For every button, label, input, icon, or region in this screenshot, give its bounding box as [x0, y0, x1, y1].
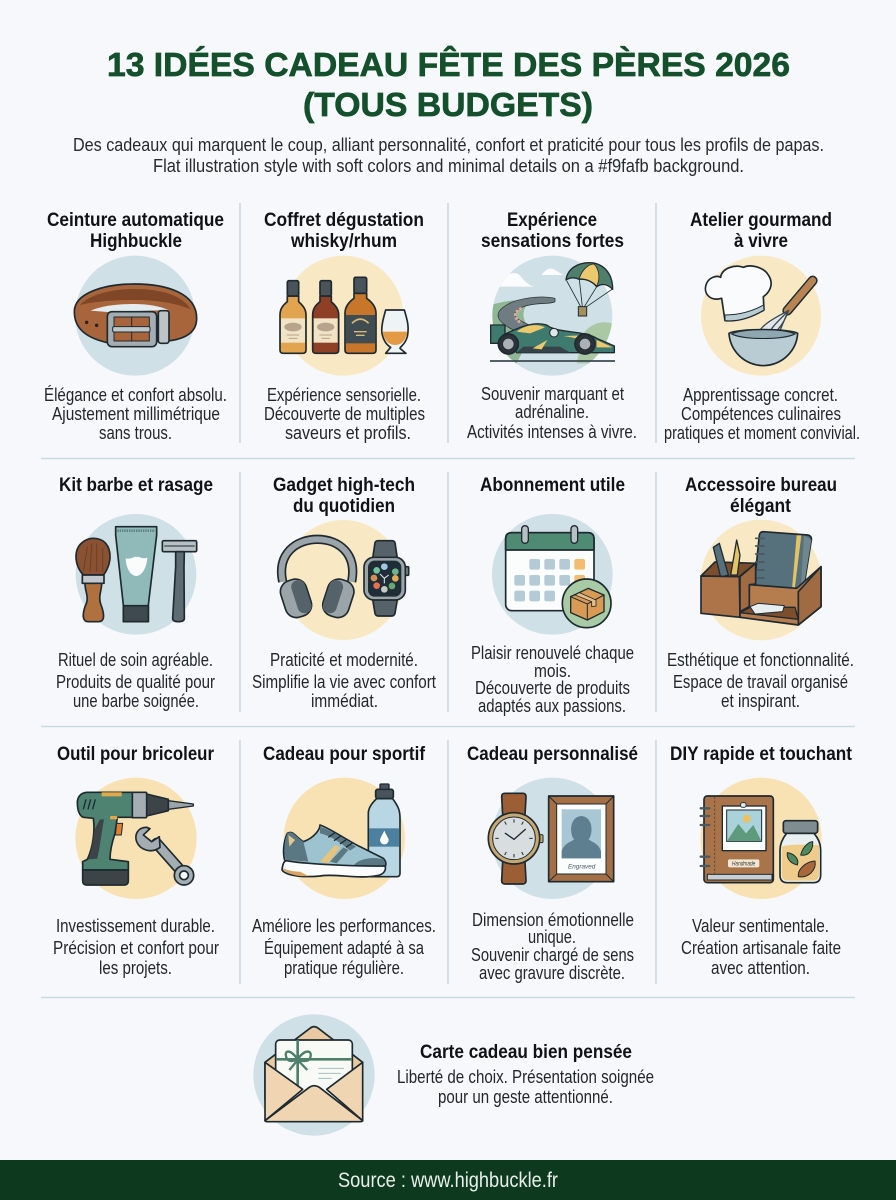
- heading: sportif: Cadeau pour sportif: [263, 744, 426, 765]
- description: DIY: Création artisanale faite: [681, 938, 841, 958]
- heading: atelier: [690, 210, 832, 252]
- panel: kit barbe: [56, 475, 215, 711]
- description: ceinture: sans trous.: [99, 423, 172, 443]
- icon: sneaker and bottle: [282, 778, 405, 899]
- description: sensations: Activités intenses à vivre.: [467, 422, 637, 442]
- icon: race car and parachute: [490, 256, 617, 376]
- description: coffret: saveurs et profils.: [285, 423, 411, 443]
- text: carte cadeau: Liberté de choix. Présentation soignée: [397, 1067, 654, 1087]
- text: carte cadeau: [397, 1042, 654, 1107]
- icon: calendar and box: [492, 514, 613, 635]
- icon: scrapbook and jar: [700, 778, 822, 899]
- icon: shaving kit: [76, 514, 197, 635]
- text: carte cadeau: pour un geste attentionné.: [438, 1087, 613, 1107]
- icon: desk organizer: [701, 520, 821, 640]
- heading: atelier: à vivre: [734, 231, 788, 252]
- heading: coffret: [264, 210, 424, 252]
- description: coffret: Découverte de multiples: [264, 404, 425, 424]
- description: sportif: pratique régulière.: [284, 958, 404, 978]
- text: carte cadeau: Carte cadeau bien pensée: [420, 1042, 632, 1063]
- description: gadget: Praticité et modernité.: [270, 650, 418, 670]
- description: accessoire: [667, 650, 854, 711]
- panel: abonnement: [471, 475, 634, 716]
- description: accessoire: et inspirant.: [721, 691, 800, 711]
- icon: chef hat, whisk and bowl: [701, 256, 821, 376]
- description: outil: les projets.: [99, 958, 172, 978]
- icon: headphones and watch: [277, 520, 409, 640]
- description: kit barbe: Rituel de soin agréable.: [58, 650, 213, 670]
- description: abonnement: Découverte de produits: [475, 678, 630, 698]
- title: [107, 46, 790, 123]
- heading: accessoire: Accessoire bureau: [685, 475, 837, 496]
- engraved caption: Engraved: [568, 864, 596, 871]
- description: DIY: Valeur sentimentale.: [692, 916, 829, 936]
- heading: sensations: [481, 210, 624, 252]
- heading: accessoire: élégant: [730, 496, 792, 517]
- panel: DIY: [670, 744, 853, 978]
- description: ceinture: [44, 385, 227, 443]
- description: gadget: immédiat.: [311, 691, 378, 711]
- description: coffret: [264, 385, 425, 443]
- panel: coffret whisky: [264, 210, 425, 443]
- panel: cadeau personnalisé: [467, 744, 638, 983]
- description: personnalisé: avec gravure discrète.: [479, 963, 625, 983]
- icon: whisky bottles: [280, 256, 408, 376]
- description: gadget: [252, 650, 436, 711]
- heading: gadget: du quotidien: [293, 496, 395, 517]
- heading: ceinture: Ceinture automatique: [47, 210, 224, 231]
- description: abonnement: Plaisir renouvelé chaque: [471, 643, 634, 663]
- heading: personnalisé: Cadeau personnalisé: [467, 744, 638, 765]
- title: 13 IDÉES CADEAU FÊTE DES PÈRES 2026: [107, 46, 790, 83]
- panel: carte cadeau: [253, 1014, 654, 1136]
- heading: atelier: Atelier gourmand: [690, 210, 832, 231]
- panel: ceinture: [44, 210, 227, 443]
- description: DIY: avec attention.: [711, 958, 810, 978]
- heading: ceinture: Highbuckle: [90, 231, 182, 252]
- description: kit barbe: une barbe soignée.: [73, 691, 199, 711]
- description: abonnement: adaptés aux passions.: [478, 696, 626, 716]
- panel: outil bricoleur: [53, 744, 219, 978]
- description: accessoire: Espace de travail organisé: [673, 672, 848, 692]
- icon: watch and photo frame: [488, 778, 614, 899]
- heading: accessoire: [685, 475, 837, 517]
- panel: sensations fortes: [467, 210, 637, 442]
- heading: sensations: Expérience: [507, 210, 597, 231]
- description: outil: Investissement durable.: [56, 916, 215, 936]
- description: personnalisé: Dimension émotionnelle: [472, 910, 634, 930]
- heading: coffret: Coffret dégustation: [264, 210, 424, 231]
- description: sensations: adrénaline.: [515, 402, 589, 422]
- description: sportif: Équipement adapté à sa: [264, 938, 425, 958]
- description: ceinture: Ajustement millimétrique: [52, 404, 220, 424]
- description: abonnement: mois.: [534, 661, 571, 681]
- heading: gadget: [273, 475, 415, 517]
- panel: gadget high-tech: [252, 475, 436, 711]
- icon: belt: [74, 256, 197, 376]
- handmade label: Handmade: [732, 861, 756, 867]
- icon: gift card envelope: [253, 1014, 375, 1136]
- description: kit barbe: [56, 650, 215, 711]
- subtitle: [73, 135, 824, 176]
- description: personnalisé: unique.: [528, 927, 576, 947]
- subtitle: Flat illustration style with soft colors and minimal details on a #f9fafb background.: [153, 156, 744, 176]
- description: atelier: Apprentissage concret.: [683, 385, 838, 405]
- description: sensations: Souvenir marquant et: [481, 384, 624, 404]
- panel: cadeau sportif: [252, 744, 436, 978]
- heading: outil: Outil pour bricoleur: [57, 744, 215, 765]
- description: sportif: Améliore les performances.: [252, 916, 436, 936]
- description: accessoire: Esthétique et fonctionnalité.: [667, 650, 854, 670]
- description: sportif: [252, 916, 436, 978]
- icon: drill and wrench: [75, 778, 197, 899]
- description: personnalisé: Souvenir chargé de sens: [471, 945, 634, 965]
- description: sensations: [467, 384, 637, 442]
- description: outil: [53, 916, 219, 978]
- heading: kit barbe: Kit barbe et rasage: [59, 475, 213, 496]
- description: DIY: [681, 916, 841, 978]
- panel: accessoire bureau: [667, 475, 854, 711]
- description: atelier: Compétences culinaires: [681, 404, 841, 424]
- heading: abonnement: Abonnement utile: [480, 475, 625, 496]
- title: (TOUS BUDGETS): [303, 86, 593, 123]
- description: kit barbe: Produits de qualité pour: [56, 672, 215, 692]
- description: atelier: [664, 385, 860, 443]
- heading: DIY: DIY rapide et touchant: [670, 744, 853, 765]
- subtitle: Des cadeaux qui marquent le coup, alliant personnalité, confort et praticité pour tous les profils de papas.: [73, 135, 824, 155]
- panel: atelier gourmand: [664, 210, 860, 443]
- heading: sensations: sensations fortes: [481, 231, 624, 252]
- description: coffret: Expérience sensorielle.: [267, 385, 421, 405]
- description: ceinture: Élégance et confort absolu.: [44, 385, 227, 405]
- heading: ceinture: [47, 210, 224, 252]
- heading: gadget: Gadget high-tech: [273, 475, 415, 496]
- description: outil: Précision et confort pour: [53, 938, 219, 958]
- description: personnalisé: [471, 910, 634, 983]
- heading: coffret: whisky/rhum: [290, 231, 397, 252]
- description: abonnement: [471, 643, 634, 716]
- footer source bar: Source : www.highbuckle.fr: [338, 1169, 558, 1192]
- description: gadget: Simplifie la vie avec confort: [252, 672, 436, 692]
- footer source bar: [0, 1160, 896, 1200]
